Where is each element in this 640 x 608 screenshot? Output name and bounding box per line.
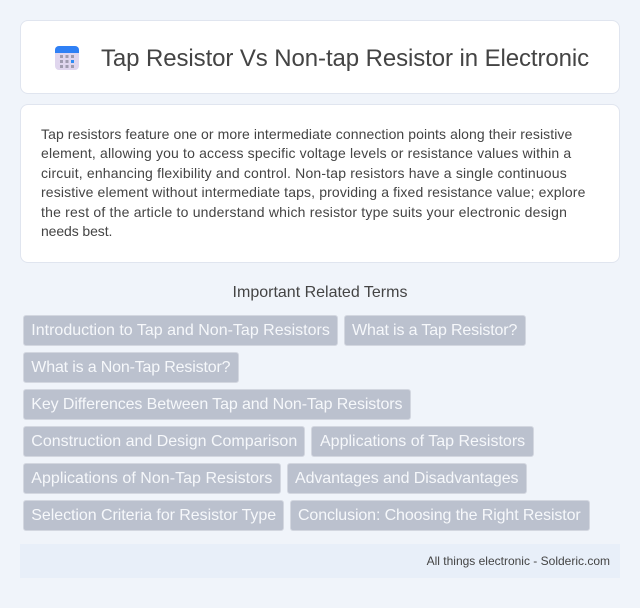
tag list (23, 315, 590, 531)
description text: element, allowing you to access specific voltage levels or resistance values within a (41, 145, 571, 161)
description text (41, 126, 586, 239)
tag: What is a Non-Tap Resistor? (31, 359, 230, 376)
tag: Conclusion: Choosing the Right Resistor (298, 507, 581, 524)
header panel (20, 20, 620, 94)
description text: Tap resistors feature one or more intermediate connection points along their resistive (41, 126, 572, 142)
tag: Introduction to Tap and Non-Tap Resistors (31, 322, 330, 339)
tag (23, 352, 239, 383)
tag: Selection Criteria for Resistor Type (31, 507, 276, 524)
heading: related terms: Important Related Terms (233, 284, 407, 301)
tag: Advantages and Disadvantages (295, 470, 518, 487)
tag (290, 500, 590, 531)
tag (23, 463, 281, 494)
panel: description (20, 104, 620, 263)
tag: Applications of Non-Tap Resistors (31, 470, 272, 487)
tag (344, 315, 526, 346)
description text: the rest of the article to understand which resistor type suits your electronic design (41, 204, 567, 220)
tag (23, 389, 411, 420)
footer credit: All things electronic - Solderic.com (427, 554, 610, 568)
tag: Key Differences Between Tap and Non-Tap Resistors (31, 396, 402, 413)
tag (23, 315, 338, 346)
icon: calendar (55, 46, 79, 70)
tag: Construction and Design Comparison (31, 433, 297, 450)
description text: resistive element without intermediate taps, providing a fixed resistance value; explore (41, 184, 586, 200)
tag (23, 500, 284, 531)
footer bar (20, 544, 620, 578)
tag (23, 426, 305, 457)
description text: circuit, enhancing flexibility and control. Non-tap resistors have a single continuous (41, 165, 567, 181)
description text: needs best. (41, 223, 112, 239)
tag: What is a Tap Resistor? (352, 322, 517, 339)
tag (287, 463, 527, 494)
tag (311, 426, 534, 457)
title: Tap Resistor Vs Non-tap Resistor in Electronic (101, 45, 589, 72)
tag: Applications of Tap Resistors (320, 433, 525, 450)
